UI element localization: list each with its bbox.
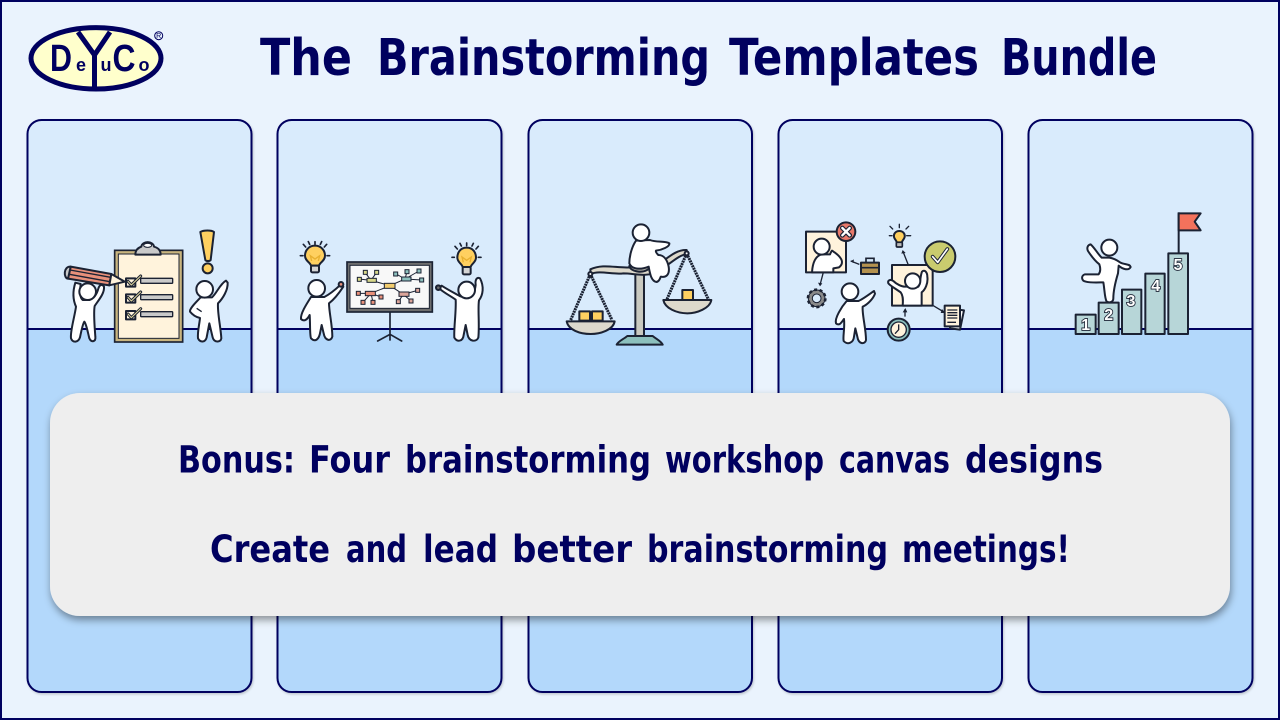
text: bonus line: brainstorming [405,438,651,482]
icon: five ascending steps with flag and climbing person: 4 [1151,278,1160,295]
callout: bonus message [50,393,1230,616]
text: bonus line: designs [965,438,1103,482]
logo: DeYuCo: e [76,55,86,75]
logo: DeYuCo: u [100,55,112,75]
text: call to action line: Create [210,528,330,571]
icon: five ascending steps with flag and climbing person: 5 [1174,257,1183,274]
icon: decision network with person, cards and symbols [806,222,964,343]
logo: DeYuCo: C [112,38,136,80]
text: call to action line: and [346,528,407,571]
title: Templates [729,29,979,88]
text: bonus line: canvas [839,438,950,482]
logo: DeYuCo: R [156,33,161,40]
panel: column 4 [778,120,1002,692]
icon: five ascending steps with flag and climbing person: 2 [1104,307,1113,324]
text: bonus line: workshop [665,438,824,482]
title: The [260,29,352,88]
title: Brainstorming [377,29,710,88]
icon: clipboard checklist with pencil and exclamation [65,230,228,342]
panel: column 3 [528,120,752,692]
logo: DeYuCo [31,28,163,90]
logo: DeYuCo: D [50,38,72,80]
icon: five ascending steps with flag and climbing person: 3 [1127,293,1136,310]
logo: DeYuCo: o [138,55,150,75]
icon: five ascending steps with flag and climbing person [1076,212,1201,334]
icon: mind map board with two people and light bulbs [300,242,483,341]
title: Bundle [1001,29,1157,88]
icon: balance scale with seated person [567,224,711,345]
panel: column 5 [1028,120,1252,692]
text: call to action line: meetings! [902,528,1070,571]
text: bonus line: Four [309,438,391,482]
icon: five ascending steps with flag and climbing person: 1 [1081,317,1090,334]
text: call to action line: better [512,528,633,571]
text: bonus line: Bonus: [178,438,295,482]
text: call to action line: lead [423,528,498,571]
panel: column 2 [278,120,502,692]
panel: column 1 [28,120,252,692]
text: call to action line: brainstorming [647,528,888,571]
